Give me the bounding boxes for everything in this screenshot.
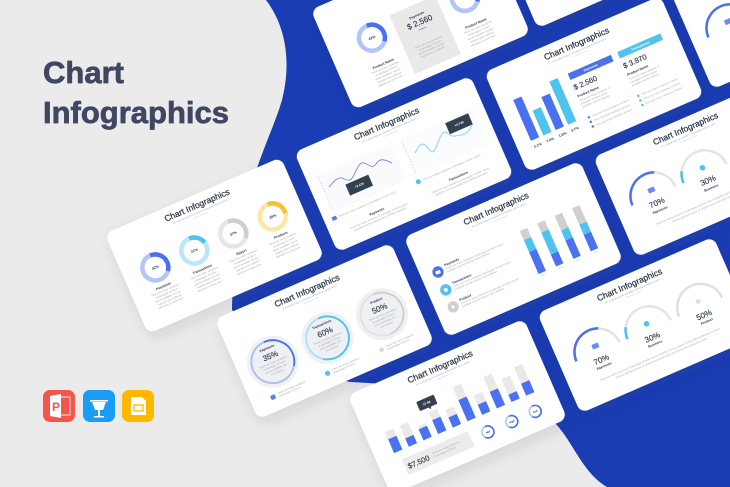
circle: product: the majority [380,320,394,329]
ring: high: High [508,418,516,425]
column: transactions [622,44,683,107]
heading: Chart Infographics [462,190,530,227]
gauge body text: form by injected humour or randomised words which don't look even slightly believable [615,336,708,380]
summary box: of passages of lorem [433,445,456,459]
bar chart [379,358,534,453]
ring: ord: Ord [532,408,538,414]
stacked bar chart: 2022 [559,266,564,270]
donut: payments: alteration in some form [158,296,184,310]
header: payments: Payments [583,63,599,72]
donut: transactions: alteration in some form [197,279,223,293]
donut right [448,0,482,15]
subtitle: It's a great way to visualize information about users [282,283,338,311]
circle: payments: the majority [270,367,285,377]
donut: report: of passages of lorem [233,253,256,266]
bar chart: 2.1% [533,142,543,149]
panel: top right cropped arc card [669,0,730,89]
gauge: payments: Payments [652,205,668,215]
gauge: product: Product [700,317,714,326]
gauge body text: There are many variations of passages of lorem ipsum available, but the majority have suffered alteration in some [599,326,721,382]
circle: product: There are many variations [368,306,398,322]
circle: payments: There are many variations [258,354,288,370]
stacked bar chart [520,205,600,278]
column: payments: available, but the majority [581,93,611,109]
icon [724,18,730,25]
blue blob background shape [232,0,730,487]
legend: payments [431,238,505,280]
caption: product [378,332,416,354]
donut: payments: majority have suffered [157,293,182,307]
panel: stacked bars card [404,161,623,337]
summary box: There are many variations [431,439,461,455]
donut: payments: 42% [151,264,160,271]
subtitle: It's a great way to visualize information about users [661,121,717,149]
column: transactions: available, but the majority [631,72,660,87]
right product text [461,15,499,48]
donut: products: There are many variations [268,231,298,247]
right product text: alteration in some form [470,33,496,48]
circle: product [348,280,416,348]
panel: circles card [215,243,434,419]
ring: mid: Mid [485,429,491,435]
legend: payments: There are many variations of passages of lorem ipsum [445,242,504,270]
circle: transactions [293,304,362,372]
donut: payments [136,249,186,311]
left product text: ipsum available, but the [374,67,402,81]
right product text: of passages of lorem [467,24,491,37]
panel: line charts card [290,65,514,252]
column: payments: passages of lorem ipsum [580,91,608,106]
left product text [369,56,406,89]
circle: transactions: ipsum available, but [319,338,342,351]
legend: product [446,273,521,314]
left product text: of passages of lorem [374,64,398,77]
donut: products: alteration in some form [275,245,301,259]
icon right [415,178,422,185]
icon: Keynote [83,390,115,422]
icon left [331,215,337,221]
gauge: payments: 70% [648,196,666,210]
circle: transactions: There are many variations [313,330,343,346]
gauge: business: Business [704,183,719,193]
legend: payments: Payments [444,257,460,267]
donut: transactions: 21% [190,247,199,254]
donut: products [254,198,303,260]
left product text: There are many variations [370,59,400,75]
donut: report: Report [236,248,248,256]
summary box [402,431,475,475]
gauge: product: 50% [695,308,713,322]
text: transactions: There are many variations of passages of lorem ipsum [431,166,490,195]
donut: products: ipsum available, but the [272,238,299,253]
legend: transactions: Transactions [451,273,472,285]
column: transactions: There are many variations of lorem [642,81,681,101]
circle: product: 50% [371,301,389,316]
bar chart: 1.6% [558,131,568,138]
column: transactions: passages of lorem ipsum [630,69,658,84]
caption: product: There are many variations [385,332,415,348]
gauge: business: 30% [643,330,662,345]
tooltip right: +4.720 [454,120,465,128]
gauge: payments: 70% [592,352,611,367]
caption left: There are many variations of passages of lorem ipsum [338,190,397,218]
grey center panel: majority have suffered [420,45,446,59]
caption: transactions [324,356,362,378]
circle: product: Product [370,296,384,305]
circle: payments: 35% [261,349,280,363]
tooltip left: +2.470 [354,181,365,189]
tooltip left [345,175,373,196]
header: transactions [617,33,663,59]
tooltip [416,395,439,414]
left product text: majority have suffered [377,70,402,84]
chart panel left [317,144,407,212]
donut: products: 28% [269,213,278,220]
grey center panel: Payments [409,10,425,21]
stacked bar chart: 2021 [541,274,547,277]
heading: Chart Infographics [352,105,421,142]
right product text: Product Name [465,17,487,30]
column: payments: Product Name [577,86,600,98]
line charts [329,125,472,187]
donut: products: Products [273,230,289,240]
donut left: 42% [368,34,377,41]
header: payments [568,55,614,80]
circle: payments [239,327,307,396]
bar chart: 7.4% [546,136,556,144]
column: payments: There are many variations of lorem [593,103,631,122]
caption: payments: There are many variations [277,379,307,395]
gauge: business: Business [648,339,663,349]
caption right: There are many variations of passages of lorem ipsum [422,153,481,182]
subtitle: It's a great way to visualize information about users [471,201,527,229]
left product text: alteration in some form [378,74,404,88]
caption: payments: of passages of lorem [278,385,302,398]
circle: payments: of passages of lorem [263,359,286,372]
legend: product: There are many variations of passages of lorem ipsum [460,277,519,305]
donut: report: ipsum available, but the [233,255,260,270]
title: Chart [43,55,124,90]
legend: transactions [438,256,513,297]
column: payments: There are many variations of lorem [591,98,629,118]
column: transactions: There are many variations of [628,64,660,81]
column: transactions: There are many variations of lorem [644,86,683,105]
donut: report: There are many variations [228,248,258,264]
panel: top cropped card [494,0,714,28]
circle: product: of passages of lorem [372,311,396,325]
legend: transactions: There are many variations of passages of lorem ipsum [453,260,512,288]
grey center panel: $ 2.560 [406,13,434,32]
gauge: payments: Payments [596,361,612,371]
legend: product: Product [459,293,473,302]
stacked bar chart: 2024 [593,251,599,255]
header: transactions: Transactions [630,40,650,52]
subtitle: It's a great way to visualize information about users [172,198,228,225]
caption: transactions: of passages of lorem [332,361,356,375]
donut: transactions: There are many variations [189,265,219,281]
right product text: majority have suffered [469,30,495,44]
heading: Chart Infographics [542,25,611,62]
donut: products: of passages of lorem [272,236,296,249]
circle: transactions: Transactions [311,319,332,331]
grey center panel [389,0,461,74]
grey center panel: of passages of lorem [418,39,442,52]
chart panel right [400,108,489,176]
icon: PowerPoint [43,390,75,422]
summary box: $7.500 [406,453,431,471]
column: transactions: Product Name [626,64,649,77]
ring: high [504,414,520,429]
subtitle: It's a great way to visualize information about users [552,36,608,64]
column: payments [572,66,633,129]
panel: gauge arcs card upper [593,81,730,257]
gauge: payments [567,321,627,377]
gauge: payments [623,165,683,221]
panel: donuts card [105,157,324,334]
text: payments: There are many variations of passages of lorem ipsum [349,202,408,230]
circle: transactions: 60% [316,325,334,340]
donut: report: alteration in some form [236,262,262,276]
legend: payments: available, but the majority have suffered [446,251,490,273]
panel: top donut card [311,0,530,110]
donut: transactions: ipsum available, but the [194,272,221,287]
panel: bar chart card [484,0,704,172]
donut: report [214,215,264,277]
arc value [699,2,730,37]
gauge: business: 30% [699,173,717,188]
donut: payments: of passages of lorem [155,287,178,300]
donut left [355,21,389,55]
heading: Chart Infographics [163,187,231,224]
donut: payments: Payments [155,281,172,291]
caption: product: of passages of lorem [386,338,410,351]
arc [699,0,730,37]
circle: transactions: the majority [325,343,340,353]
bar chart: 3.7% [570,126,580,133]
caption: payments [269,379,308,401]
donut: transactions: of passages of lorem [194,270,217,283]
heading: Chart Infographics [273,272,341,309]
heading: Chart Infographics [651,110,720,147]
caption: transactions: There are many variations [331,356,361,372]
legend: product: available, but the majority have suffered [461,286,505,308]
grey center panel: ipsum available, but the [418,41,445,56]
circle: transactions: of passages of lorem [317,335,341,348]
column: payments: $ 2.560 [572,74,599,92]
column: payments: There are many variations of [579,86,611,103]
panel: monthly bars card [348,319,567,487]
column: payments: There are many variations of lorem [595,107,633,127]
subtitle: It's a great way to visualize information about users [362,116,418,144]
donut: report: majority have suffered [235,259,260,273]
text: transactions: available, but the majority have suffered alteration [435,170,489,197]
heading: Chart Infographics [595,266,664,303]
subtitle: It's a great way to visualize information about users [415,359,471,387]
right product text: ipsum available, but the [467,26,494,41]
panel: gauge arcs card lower [537,237,730,413]
text: payments: Payments [369,207,385,217]
circle: payments: ipsum available, but [265,362,287,375]
grey center panel: There are many variations [414,34,444,50]
column: transactions: $ 3.870 [622,52,648,70]
donut: transactions: Transactions [192,263,213,275]
column: transactions: There are many variations of lorem [640,77,679,96]
tooltip right [445,113,473,134]
donut: products: majority have suffered [274,242,300,256]
donut: transactions [175,232,225,294]
text: payments: available, but the majority have suffered alteration [353,206,408,232]
right product text: There are many variations [463,19,493,35]
gauge: business [674,143,730,199]
circle: payments: Payments [259,343,275,353]
ring: mid [480,424,496,440]
tooltip: 37.5K [422,399,432,407]
gauge: business [618,299,678,355]
stacked bar chart: 2023 [576,258,582,262]
icon: PowerPoint: P [52,400,60,414]
gauge: product [670,276,729,333]
donut: payments: ipsum available, but the [155,289,182,304]
heading: Chart Infographics [406,348,474,385]
circle: product: ipsum available, but [374,315,397,328]
text: transactions: Transactions [448,170,469,182]
donut: transactions: majority have suffered [196,276,221,290]
donut: report: 37% [229,230,238,237]
left product text: Product Name [372,57,395,70]
ring: ord [527,403,543,419]
subtitle: It's a great way to visualize information about users [605,277,661,305]
icon: Google Slides [122,390,154,422]
donut: payments: There are many variations [150,282,180,298]
legend: transactions: available, but the majority have suffered [454,269,498,291]
title second line: Infographics [43,95,229,130]
bar chart [512,78,580,149]
